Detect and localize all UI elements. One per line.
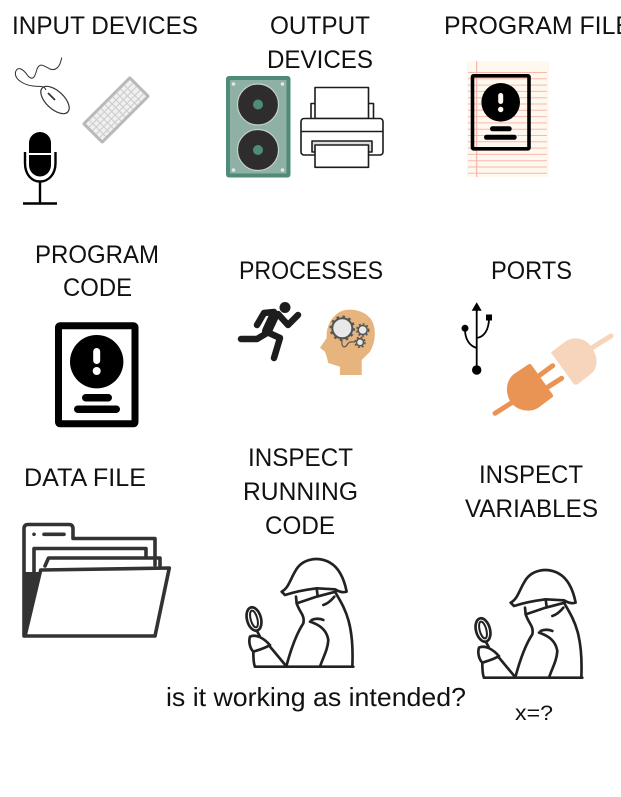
icon: detective — [473, 570, 582, 678]
heading: ports: PORTS — [491, 257, 572, 285]
caption: is it working: is it working as intended? — [166, 682, 466, 712]
icon: detective — [244, 559, 353, 667]
heading: input devices: INPUT DEVICES — [12, 12, 198, 40]
panel: inspect variables — [465, 461, 598, 725]
heading: inspect running code: INSPECT — [248, 444, 353, 472]
heading: output devices: DEVICES — [267, 46, 373, 74]
panel: inspect running code — [166, 444, 466, 712]
icon: usb symbol — [462, 302, 492, 375]
heading: program code: PROGRAM — [35, 241, 159, 269]
icon: microphone — [23, 132, 57, 204]
icon: keyboard — [82, 76, 150, 144]
panel: input devices — [12, 12, 198, 204]
caption: x=?: x=? — [515, 702, 553, 725]
panel: program code — [35, 241, 159, 424]
icon: folder — [24, 524, 169, 636]
panel: output devices — [226, 12, 383, 178]
icon: document with exclamation — [58, 326, 135, 424]
heading: output devices — [267, 12, 373, 74]
icon: light plug — [551, 336, 611, 385]
heading: inspect variables: INSPECT — [479, 461, 583, 489]
icon: orange plug — [495, 364, 562, 413]
icon: printer — [301, 88, 383, 167]
heading: data file: DATA FILE — [24, 464, 146, 492]
panel: data file — [24, 464, 169, 636]
heading: inspect running code: CODE — [265, 512, 335, 540]
heading: inspect running code: RUNNING — [243, 478, 358, 506]
icon: running person — [241, 302, 298, 358]
heading: processes: PROCESSES — [239, 257, 383, 285]
panel: ports — [462, 257, 611, 413]
heading: inspect variables: VARIABLES — [465, 495, 598, 523]
icon: lined paper — [467, 61, 549, 177]
icon: head with gears — [320, 310, 375, 375]
heading: program code — [35, 241, 159, 302]
heading: inspect running code — [243, 444, 358, 540]
icon: speaker — [226, 76, 290, 178]
icon: mouse — [15, 58, 74, 119]
icon: document with exclamation — [472, 76, 529, 149]
heading: program code: CODE — [63, 274, 132, 302]
panel: processes — [239, 257, 383, 375]
heading: inspect variables — [465, 461, 598, 523]
heading: output devices: OUTPUT — [270, 12, 370, 40]
panel: program file — [444, 12, 621, 177]
